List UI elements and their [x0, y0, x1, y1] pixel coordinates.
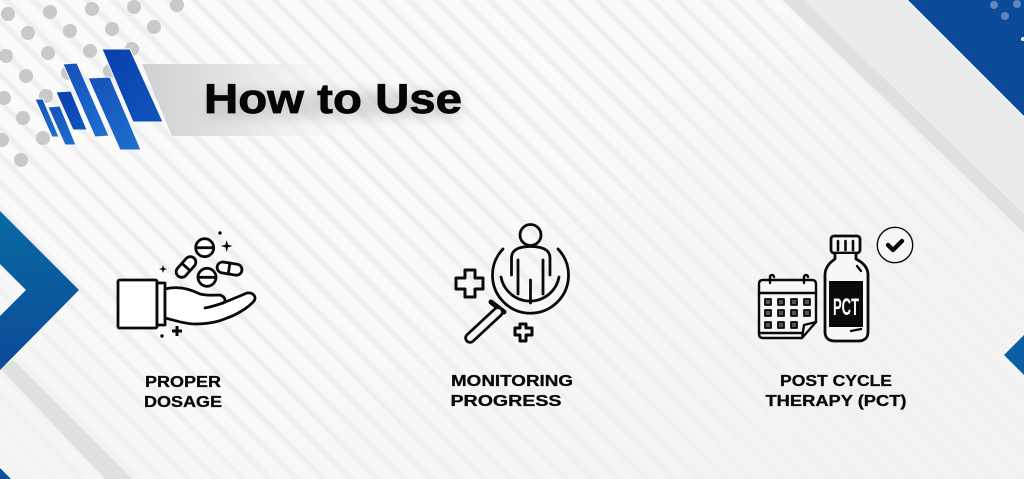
decorative dot grid [0, 0, 184, 167]
right blue diamond [1004, 335, 1024, 375]
icon: hand with pills [118, 231, 255, 338]
top right corner: grey bands and blue triangle [783, 0, 1024, 233]
label: proper dosage: PROPER [145, 374, 221, 391]
calendar [759, 275, 816, 338]
label: post cycle therapy: THERAPY (PCT) [766, 393, 906, 410]
label: proper dosage: DOSAGE [144, 394, 222, 411]
title: How to Use [204, 75, 462, 122]
left corner: grey band [0, 360, 132, 479]
logo: rising blue bars [35, 49, 163, 150]
title banner [142, 64, 367, 136]
bottom left blue corner [0, 468, 11, 479]
label: monitoring progress: PROGRESS [450, 393, 562, 410]
left blue chevron [0, 211, 79, 370]
label: monitoring progress [450, 373, 573, 410]
icon: magnifier with person [456, 224, 568, 341]
label: post cycle therapy: POST CYCLE [780, 373, 892, 390]
label: proper dosage [144, 374, 222, 411]
bottle label text: PCT [833, 294, 859, 321]
bottle [825, 236, 868, 341]
check badge [877, 227, 913, 263]
title shadow [205, 92, 460, 118]
label: monitoring progress: MONITORING [451, 373, 573, 390]
icon: calendar and PCT bottle [759, 227, 913, 341]
label: post cycle therapy [766, 373, 906, 410]
